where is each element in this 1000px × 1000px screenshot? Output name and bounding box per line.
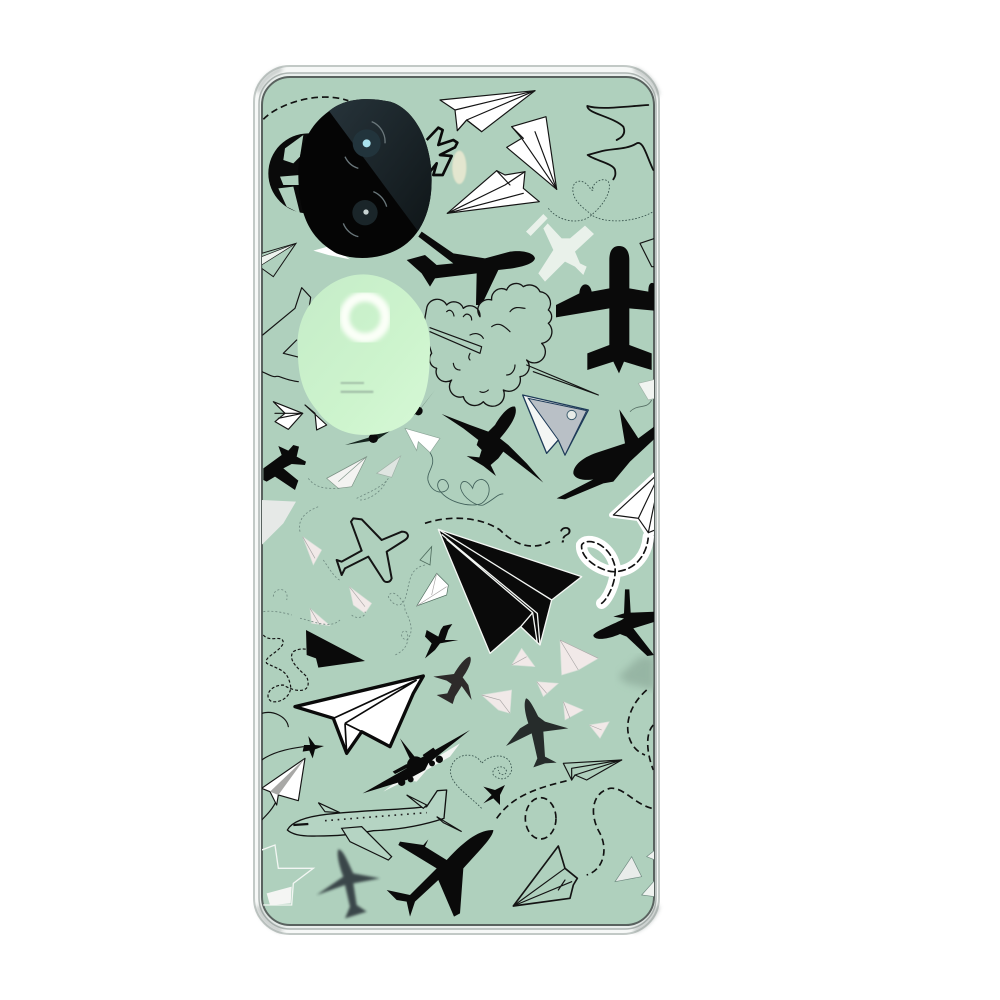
squiggle line [587,105,653,179]
glossy diagonal panel [328,93,440,247]
hidden plane dark pieces [345,390,435,445]
case inner rim [259,73,656,929]
case outer clear bumper [254,66,659,934]
white sticker plane [612,475,657,535]
small plane under camera [313,246,350,259]
large white paper plane [295,676,423,753]
large black paper plane [438,529,582,653]
paper plane bottom left [262,758,305,805]
outline paper plane [563,760,622,780]
oval body [298,274,430,435]
paper plane small b [377,456,401,477]
dashed loop center [388,565,425,655]
outline plane left [262,288,311,382]
green oval light module [298,274,430,435]
icon: large black plane [556,246,654,373]
dashed heart trail [548,180,653,221]
lens upper [345,122,385,168]
paper plane blue and white [523,395,588,455]
paper plane with trail and heart [405,428,503,505]
white outline plane bottom left [262,845,313,905]
dotted trail a [308,478,388,498]
lower pattern [262,475,657,918]
outline paper plane bottom [513,846,577,906]
small paper plane left b [305,405,327,430]
dashed heart [450,755,512,808]
paper plane middle [447,171,539,213]
icon: black globe [268,133,309,214]
airplane pattern [262,91,657,918]
contrails [430,328,598,395]
big black airliner [387,830,493,917]
dark plane b [433,657,472,704]
top left bumper [258,69,282,92]
paper plane edge right [638,379,655,400]
iridescent flash [452,151,466,184]
upper pattern [262,91,655,505]
small paper planes bottom right [615,850,655,897]
camera body [298,99,432,258]
heart-shaped cloud [423,283,552,406]
paper plane small a [327,457,367,488]
white sticker loop [582,537,648,603]
grey smudge [618,657,655,690]
icon: black plane right [557,409,655,499]
icon: black plane center [442,406,543,483]
icon: white plane [526,214,594,282]
paper plane top [440,91,535,132]
paper plane right [507,117,557,189]
dashed flight path top left [263,97,348,119]
phone case [254,66,659,934]
corner bumper sparkle [258,69,658,931]
outlined plane [337,518,408,582]
paper plane left [262,243,296,277]
icon: outlined small plane behind camera [427,128,457,175]
dashed path with question mark: ? [558,523,571,548]
bottom right bumper [634,906,658,931]
torn white patch [262,500,296,545]
faint printed marks [341,382,373,393]
small paper plane left a [273,402,303,429]
grey dotted trails [263,480,387,624]
top right bumper [634,69,658,95]
dashed scribble left [263,635,308,702]
jet front view [363,730,470,793]
icon: small black plane left [263,445,306,490]
blurred plane [317,849,380,918]
line airliner [287,790,462,860]
icon: black airliner below camera [407,232,535,305]
small black plane a [425,624,458,658]
dark plane c [506,698,568,767]
tiny plane left [303,736,324,758]
small black plane d [483,785,505,805]
lens lower [343,192,387,237]
black triangle plane [306,630,365,668]
icon: black plane right [593,589,655,656]
light ring [344,297,386,338]
bottom left bumper [258,906,282,931]
small plane top right [640,238,655,267]
thin arcs left [262,712,303,820]
scribble right [630,400,652,412]
mint back panel [262,77,654,925]
rear camera module [298,93,440,258]
small pale paper planes [303,537,609,738]
dashed flight paths bottom [497,690,653,875]
dashed path with question mark [425,518,571,548]
